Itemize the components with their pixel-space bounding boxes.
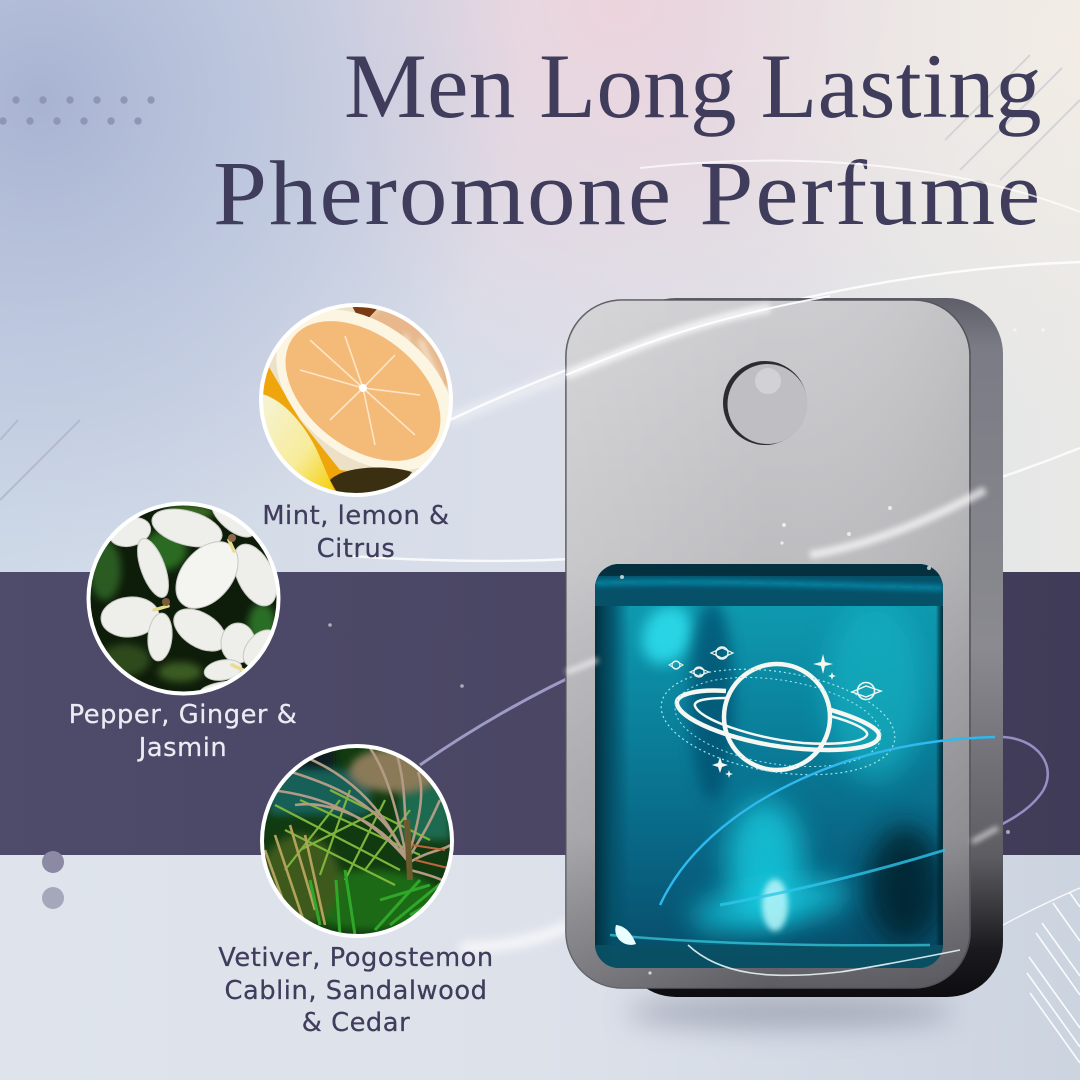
title: Pheromone Perfume <box>213 142 1042 244</box>
caption: lemon: Citrus <box>317 534 395 564</box>
caption: vetiver: Vetiver, Pogostemon <box>218 943 494 973</box>
bottle highlights and orbit swirls <box>566 296 1000 975</box>
decorative dots top left <box>0 96 155 125</box>
caption: lemon: Mint, lemon & <box>262 501 450 531</box>
ingredient circle: lemon <box>259 303 453 497</box>
title: Men Long Lasting <box>344 35 1042 137</box>
ingredient circle: jasmine <box>86 502 280 696</box>
planet emblem <box>654 647 902 790</box>
caption: vetiver <box>218 943 494 1038</box>
perfume bottle <box>562 295 1003 1042</box>
ingredient circle: vetiver <box>260 744 454 938</box>
spray button <box>723 361 808 445</box>
title <box>213 35 1042 244</box>
caption: jasmine: Jasmin <box>139 732 227 762</box>
bottle front <box>566 300 970 988</box>
decorative dots lower left <box>42 851 64 909</box>
bottle side edge <box>620 298 1003 997</box>
caption: lemon <box>262 501 450 564</box>
caption: jasmine <box>69 700 297 762</box>
blue liquid window <box>595 564 943 968</box>
caption: vetiver: Cablin, Sandalwood <box>224 976 488 1006</box>
caption: jasmine: Pepper, Ginger & <box>69 700 297 730</box>
emblem stars <box>712 654 836 778</box>
dark horizontal band <box>0 572 1080 855</box>
caption: vetiver: & Cedar <box>302 1008 410 1038</box>
